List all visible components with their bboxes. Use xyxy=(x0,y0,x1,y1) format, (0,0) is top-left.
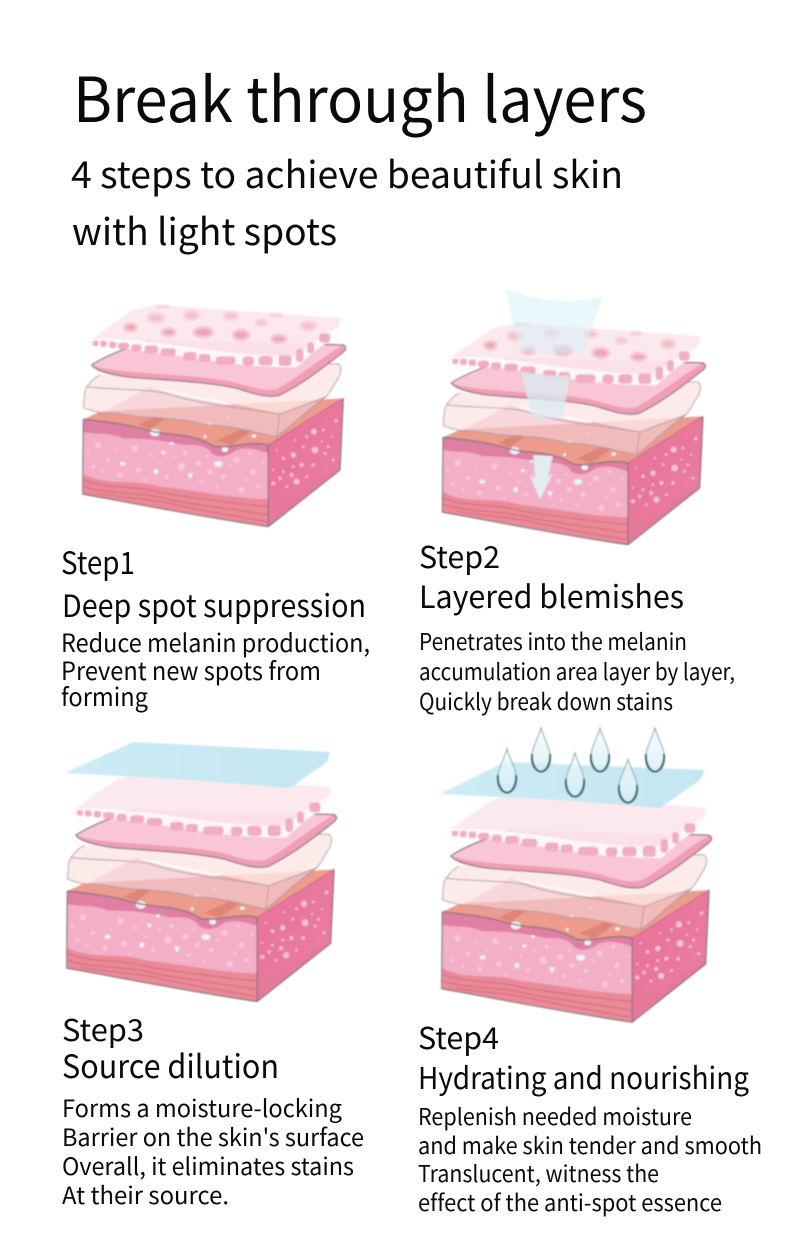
step 3 description: Overall, it eliminates stains xyxy=(62,1147,354,1182)
panel: step 1 xyxy=(61,305,370,714)
step 1 description xyxy=(61,624,370,714)
step 4 label: Step4 xyxy=(418,1014,499,1058)
subtitle: with light spots xyxy=(72,202,337,256)
step 3 description: Forms a moisture-locking xyxy=(62,1089,342,1124)
panel: step 2 xyxy=(419,289,735,717)
moisture film layer xyxy=(65,742,330,788)
step 4 description: Replenish needed moisture xyxy=(418,1098,692,1132)
step 2 heading: Layered blemishes xyxy=(419,572,684,617)
hydration film layer xyxy=(440,762,705,808)
icon: water drops xyxy=(498,728,664,803)
step 2 description: Penetrates into the melanin xyxy=(419,623,687,657)
step 3 description: Barrier on the skin's surface xyxy=(62,1118,364,1153)
step 2 description xyxy=(419,623,735,717)
illustration: skin layers step 1 xyxy=(83,305,346,527)
step 2 description: accumulation area layer by layer, xyxy=(419,653,735,687)
step 1 label: Step1 xyxy=(61,538,135,583)
panel: step 3 xyxy=(62,742,364,1211)
illustration: skin layers step 2 xyxy=(442,323,705,545)
step 4 description: and make skin tender and smooth xyxy=(418,1127,762,1161)
title: Break through layers xyxy=(73,50,647,140)
step 2 description: Quickly break down stains xyxy=(419,683,673,717)
step 1 description: Reduce melanin production, xyxy=(61,624,370,660)
subtitle: 4 steps to achieve beautiful skin xyxy=(71,145,623,199)
illustration: skin layers step 4 xyxy=(442,794,712,1022)
step 2 label: Step2 xyxy=(419,533,500,577)
step 4 heading: Hydrating and nourishing xyxy=(418,1054,749,1098)
step 3 heading: Source dilution xyxy=(62,1042,279,1088)
step 4 description xyxy=(418,1098,762,1218)
step 1 heading: Deep spot suppression xyxy=(62,581,366,626)
subtitle xyxy=(71,145,623,256)
step 4 description: Translucent, witness the xyxy=(418,1155,659,1189)
panel: step 4 xyxy=(418,728,762,1218)
step 3 description xyxy=(62,1089,364,1211)
step 3 label: Step3 xyxy=(62,1006,144,1050)
step 4 description: effect of the anti-spot essence xyxy=(418,1184,722,1218)
step 3 description: At their source. xyxy=(62,1176,229,1211)
illustration: skin layers step 3 xyxy=(67,773,337,1002)
icon: penetrating light beam and arrow xyxy=(505,289,603,500)
step 1 description: Prevent new spots from xyxy=(61,652,321,688)
step 1 description: forming xyxy=(61,678,148,714)
